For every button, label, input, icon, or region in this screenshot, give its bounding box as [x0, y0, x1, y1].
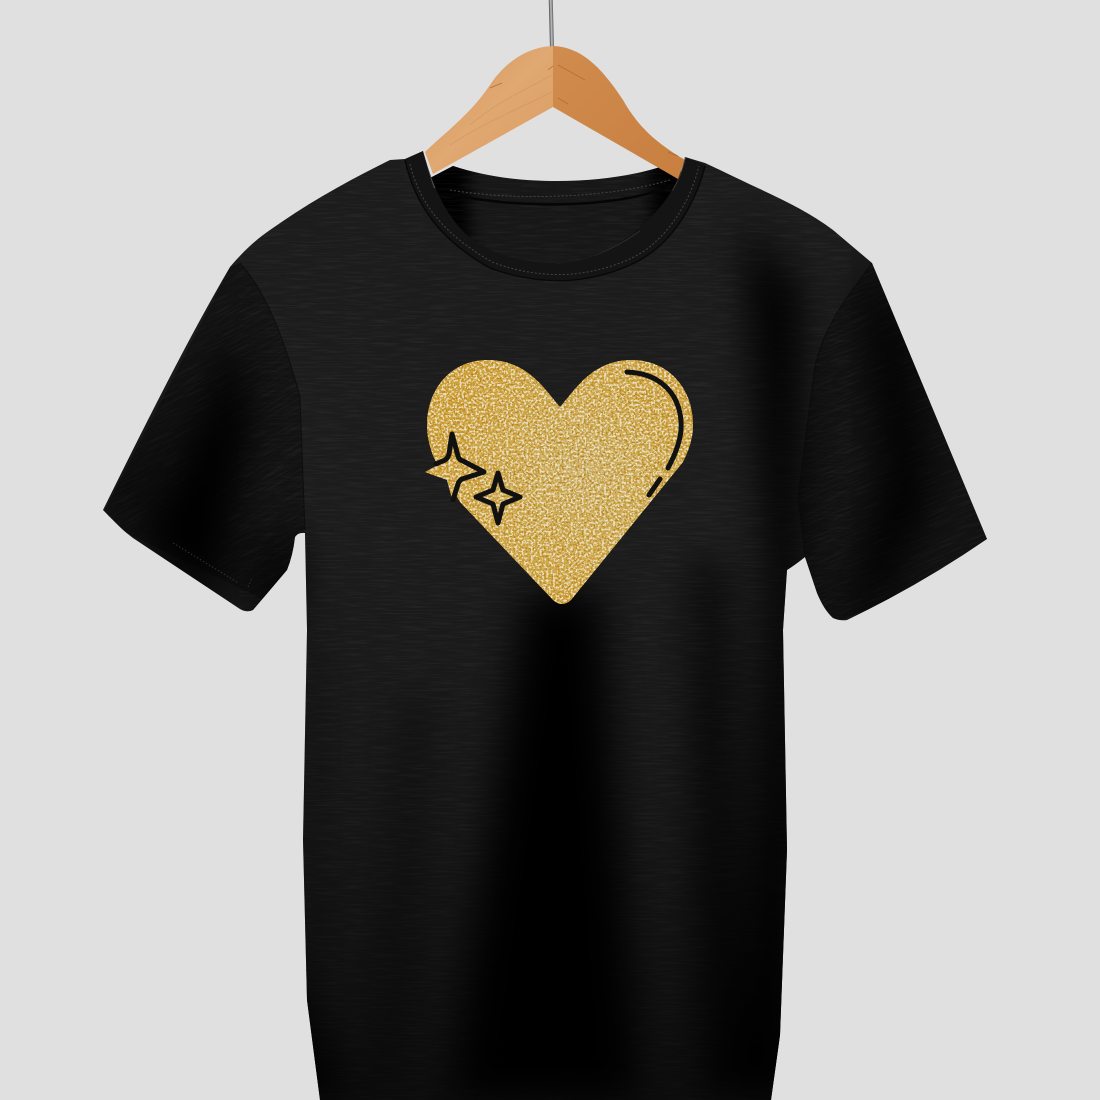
- sleeve seams: [240, 263, 305, 530]
- wooden hanger: [425, 46, 685, 179]
- left sleeve shade and texture: [104, 264, 304, 599]
- gold glitter heart: [420, 355, 700, 610]
- sleeve hem stitching: [173, 543, 252, 587]
- icon: small sparkle outline: [476, 473, 520, 523]
- right sleeve shade and texture: [805, 264, 987, 620]
- neck band: [405, 151, 705, 280]
- heart highlight arc: [627, 372, 681, 468]
- fabric folds and shadows: [104, 220, 930, 1100]
- t-shirt body: [103, 151, 987, 1100]
- hanger hook: [549, 0, 554, 48]
- icon: large sparkle outline: [436, 434, 484, 500]
- back neck interior: [431, 166, 682, 263]
- neck stitching: [410, 164, 699, 275]
- heart highlight dash: [649, 479, 660, 495]
- fabric heather texture: [264, 173, 847, 854]
